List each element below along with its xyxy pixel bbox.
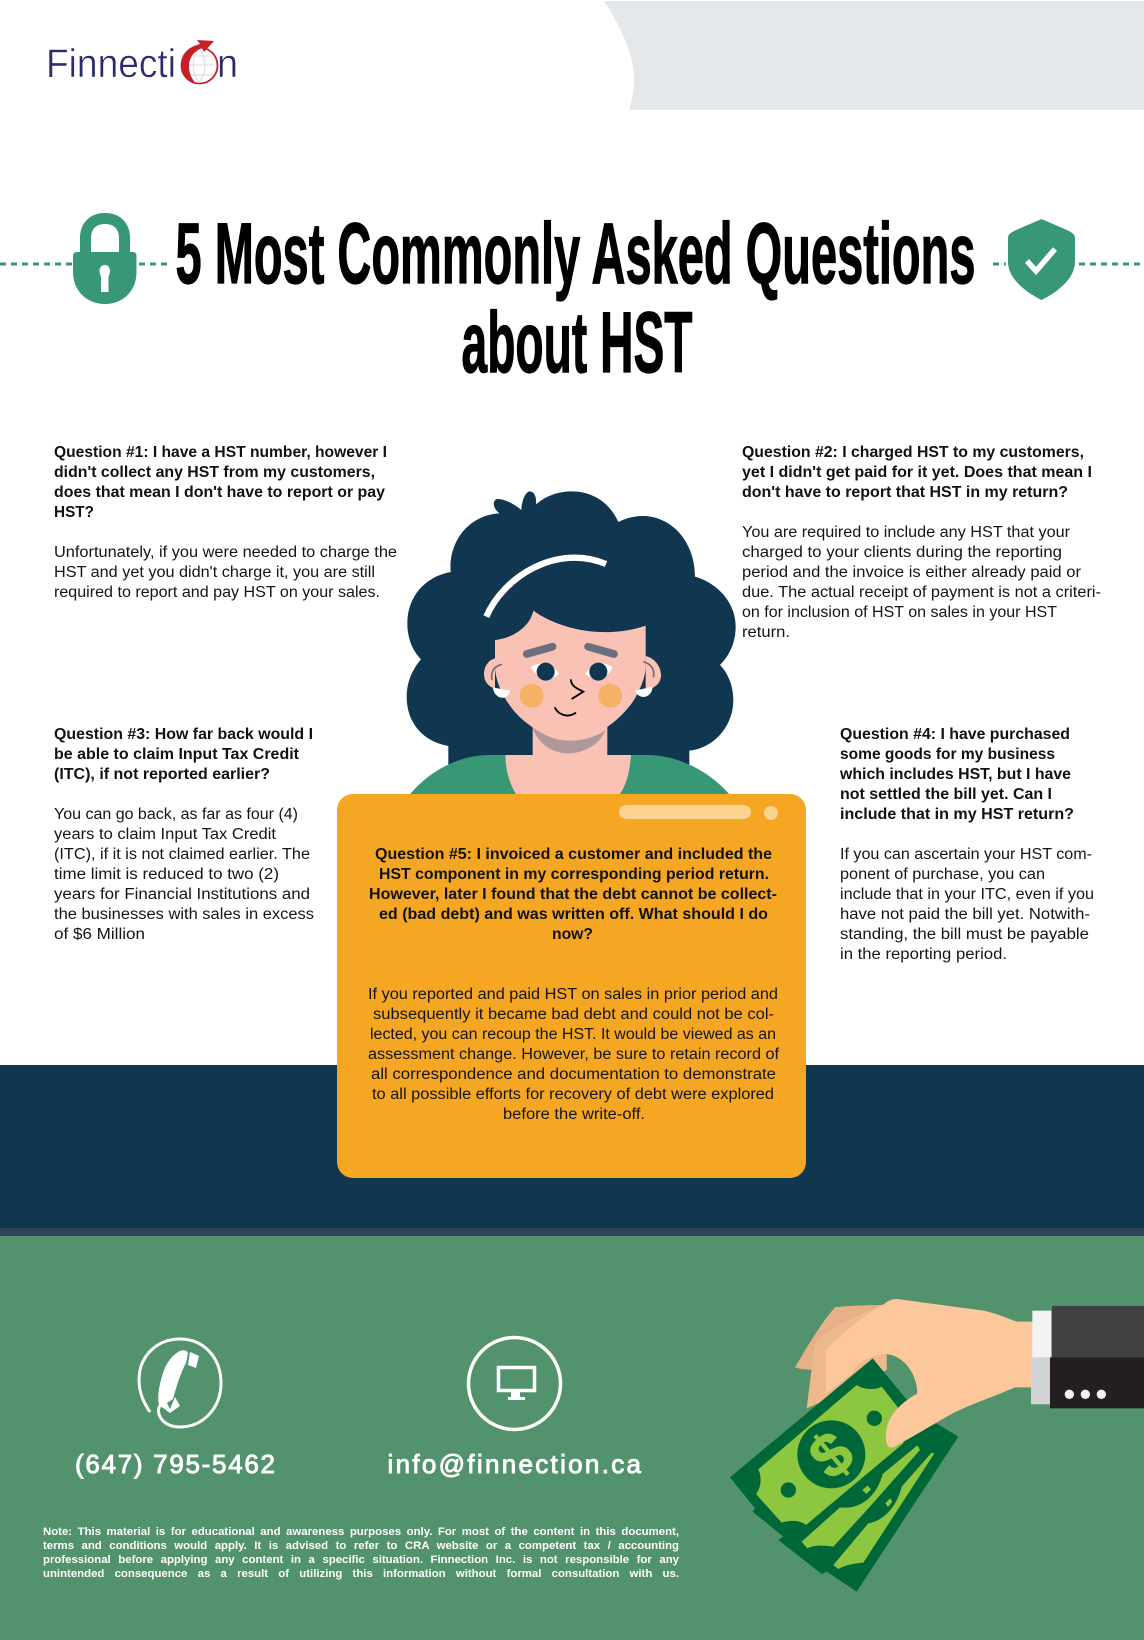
disclaimer note: Note: This material is for educational and awareness purposes only. For most of the content in this document, <box>43 1526 679 1538</box>
illustration: woman <box>407 491 736 795</box>
question 5 heading: Question #5: I invoiced a customer and included the <box>375 846 772 863</box>
title: about HST <box>462 295 692 391</box>
panel: question 1: required to report and pay HST on your sales. <box>54 584 380 601</box>
panel: question 1: didn't collect any HST from my customers, <box>54 464 375 481</box>
panel: question 2: on for inclusion of HST on sales in your HST <box>742 604 1058 621</box>
banknotes: $ <box>796 1418 867 1493</box>
panel: question 4: have not paid the bill yet. Notwith- <box>840 906 1090 923</box>
question 5 answer: subsequently it became bad debt and could not be col- <box>373 1006 774 1023</box>
panel: question 3: time limit is reduced to two (2) <box>54 866 279 883</box>
illustration: hand holding money <box>730 1299 1144 1592</box>
icon: monitor <box>468 1338 560 1430</box>
panel: question 3: years to claim Input Tax Credit <box>54 826 277 843</box>
neck <box>533 723 607 760</box>
band edge strip <box>0 1228 1144 1236</box>
panel: question 2: don't have to report that HST in my return? <box>742 484 1068 501</box>
panel: question 1: does that mean I don't have to report or pay <box>54 484 385 501</box>
panel: question 2: yet I didn't get paid for it yet. Does that mean I <box>742 464 1092 481</box>
panel: question 4: not settled the bill yet. Can I <box>840 786 1052 803</box>
question 5 answer: all correspondence and documentation to demonstrate <box>371 1066 776 1083</box>
question 5 answer: before the write-off. <box>503 1106 645 1123</box>
panel: question 2: charged to your clients during the reporting <box>742 544 1062 561</box>
card pill <box>619 805 751 819</box>
logo: Finnection: Finnecti <box>46 42 176 86</box>
question 5 heading <box>369 846 777 943</box>
neck shadow <box>533 727 605 753</box>
nose and mouth <box>555 679 583 716</box>
panel: question 1: Unfortunately, if you were needed to charge the <box>54 544 397 561</box>
icon: shield with check <box>1008 219 1075 300</box>
panel: question 5 card <box>337 794 806 1178</box>
panel: question 4 <box>839 726 1094 963</box>
panel: question 4: Question #4: I have purchased <box>840 726 1070 743</box>
earrings <box>493 687 653 698</box>
panel: question 3: of $6 Million <box>54 926 145 943</box>
panel: question 2 <box>742 444 1101 641</box>
face <box>495 607 646 740</box>
panel: question 4: include that in your ITC, even if you <box>840 886 1094 903</box>
icon: telephone <box>139 1339 221 1427</box>
eyes <box>531 663 613 681</box>
back fingers <box>795 1305 887 1370</box>
question 5 answer: lected, you can recoup the HST. It would be viewed as an <box>370 1026 776 1043</box>
panel: question 2: due. The actual receipt of payment is not a criteri- <box>742 584 1101 601</box>
panel: question 2: return. <box>742 624 790 641</box>
panel: question 2: period and the invoice is either already paid or <box>742 564 1081 581</box>
disclaimer note <box>43 1526 679 1580</box>
icon: padlock <box>73 218 136 304</box>
panel: question 4: in the reporting period. <box>840 946 1007 963</box>
ears <box>484 656 661 690</box>
panel: question 4: If you can ascertain your HST com- <box>840 846 1092 863</box>
title <box>176 206 976 391</box>
chest <box>505 755 631 795</box>
banknotes <box>730 1358 958 1592</box>
eyebrows <box>527 647 614 654</box>
jacket sleeve <box>1050 1306 1144 1408</box>
green footer <box>0 1236 1144 1640</box>
palm <box>826 1299 1033 1424</box>
disclaimer note: terms and conditions would apply. It is advised to refer to CRA website or a competent tax / accounting <box>43 1540 679 1552</box>
logo: Finnection <box>46 40 238 86</box>
question 5 heading: However, later I found that the debt cannot be collect- <box>369 886 777 903</box>
panel: question 3: (ITC), if it is not claimed earlier. The <box>54 846 310 863</box>
panel: question 4: ponent of purchase, you can <box>840 866 1045 883</box>
panel: question 1 <box>54 444 397 601</box>
panel: question 4: include that in my HST return? <box>840 806 1074 823</box>
question 5 answer: to all possible efforts for recovery of debt were explored <box>372 1086 774 1103</box>
cheeks <box>520 684 622 708</box>
thumb <box>886 1370 967 1448</box>
dotted rule left <box>0 262 172 266</box>
hair back <box>407 491 736 770</box>
panel: question 3 <box>54 726 314 943</box>
dotted rule right <box>993 262 1144 266</box>
panel: question 4: some goods for my business <box>840 746 1055 763</box>
ear details <box>492 662 654 680</box>
question 5 heading: now? <box>552 926 593 943</box>
question 5 heading: ed (bad debt) and was written off. What should I do <box>379 906 768 923</box>
panel: question 3: Question #3: How far back would I <box>54 726 313 743</box>
phone number: (647) 795-5462 <box>75 1449 275 1479</box>
front hair <box>490 570 649 640</box>
logo: Finnection: n <box>217 42 238 86</box>
question 5 answer: assessment change. However, be sure to retain record of <box>368 1046 780 1063</box>
email address: info@finnection.ca <box>388 1449 642 1479</box>
panel: question 3: the businesses with sales in excess <box>54 906 314 923</box>
question 5 heading: HST component in my corresponding period return. <box>379 866 769 883</box>
header grey shape <box>604 1 1144 110</box>
panel: question 1: HST? <box>54 504 94 521</box>
panel: question 2: Question #2: I charged HST to my customers, <box>742 444 1084 461</box>
panel: question 3: You can go back, as far as four (4) <box>54 806 298 823</box>
panel: question 1: Question #1: I have a HST number, however I <box>54 444 387 461</box>
question 5 answer <box>368 986 780 1123</box>
panel: question 1: HST and yet you didn't charge it, you are still <box>54 564 375 581</box>
question 5 answer: If you reported and paid HST on sales in prior period and <box>368 986 778 1003</box>
shirt <box>409 755 730 795</box>
disclaimer note: professional before applying any content in a specific situation. Finnection Inc. is not responsible for any <box>43 1554 679 1566</box>
headband <box>486 558 606 617</box>
panel: question 3: be able to claim Input Tax Credit <box>54 746 299 763</box>
panel: question 4: standing, the bill must be payable <box>840 926 1089 943</box>
panel: question 2: You are required to include any HST that your <box>742 524 1070 541</box>
shirt cuff <box>1031 1311 1051 1404</box>
panel: question 4: which includes HST, but I have <box>839 766 1071 783</box>
panel: question 3: (ITC), if not reported earlier? <box>54 766 270 783</box>
disclaimer note: unintended consequence as a result of utilizing this information without formal consultation with us. <box>43 1568 679 1580</box>
panel: question 3: years for Financial Institutions and <box>54 886 310 903</box>
card dot <box>764 806 778 820</box>
navy band <box>0 1065 1144 1228</box>
